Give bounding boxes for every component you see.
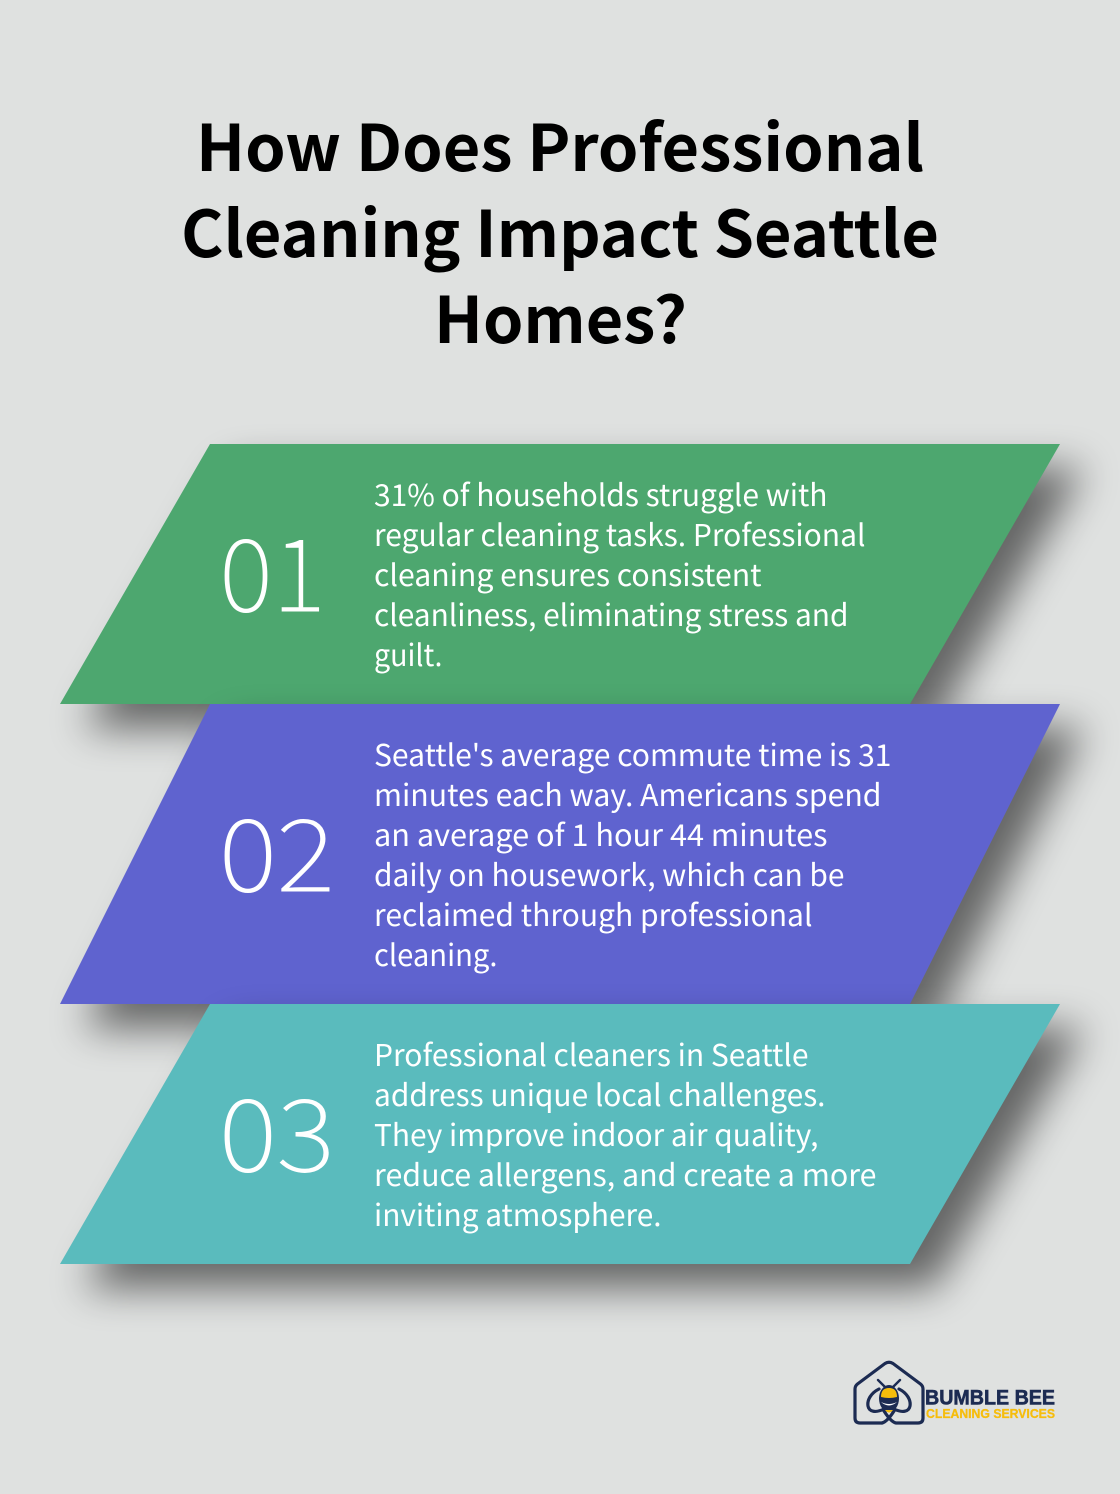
text: step 03 description: They improve indoor air quality, xyxy=(374,1111,818,1155)
panel: step 01 xyxy=(60,444,1084,728)
text: brand name: BUMBLE BEE xyxy=(925,1386,1055,1410)
title: How Does Professional xyxy=(196,98,924,190)
text: step 02 description: cleaning. xyxy=(374,931,498,975)
text: step 02 description: minutes each way. Americans spend xyxy=(374,771,882,815)
number 01: 01 xyxy=(220,495,326,640)
text: step 02 description: reclaimed through professional xyxy=(374,891,812,935)
text: step 01 description: cleaning ensures consistent xyxy=(374,551,762,595)
text: step 01 description: 31% of households struggle with xyxy=(374,471,828,515)
text: step 03 description: address unique local challenges. xyxy=(374,1071,826,1115)
number 02: 02 xyxy=(219,775,334,920)
text: step 01 description: guilt. xyxy=(374,631,442,675)
text: step 01 description: cleanliness, eliminating stress and xyxy=(374,591,848,635)
text: step 03 description xyxy=(374,1031,876,1235)
text: step 02 description: Seattle's average commute time is 31 xyxy=(374,731,892,775)
logo: Bumble Bee Cleaning Services xyxy=(855,1362,1055,1423)
text: step 03 description: reduce allergens, and create a more xyxy=(374,1151,876,1195)
panel: step 03 xyxy=(60,1004,1084,1288)
text: brand tagline: CLEANING SERVICES xyxy=(926,1407,1055,1421)
icon: house outline with bee xyxy=(855,1362,923,1423)
title xyxy=(181,98,939,362)
text: step 03 description: inviting atmosphere. xyxy=(374,1191,662,1235)
title: Cleaning Impact Seattle xyxy=(181,184,939,276)
text: step 02 description: an average of 1 hour 44 minutes xyxy=(374,811,828,855)
title: Homes? xyxy=(434,270,687,362)
number 03: 03 xyxy=(219,1055,334,1200)
panel: step 02 xyxy=(60,704,1084,1028)
text: step 02 description xyxy=(374,731,892,975)
text: step 02 description: daily on housework, which can be xyxy=(374,851,844,895)
text: step 01 description xyxy=(374,471,866,675)
text: step 01 description: regular cleaning tasks. Professional xyxy=(374,511,866,555)
text: step 03 description: Professional cleaners in Seattle xyxy=(374,1031,808,1075)
